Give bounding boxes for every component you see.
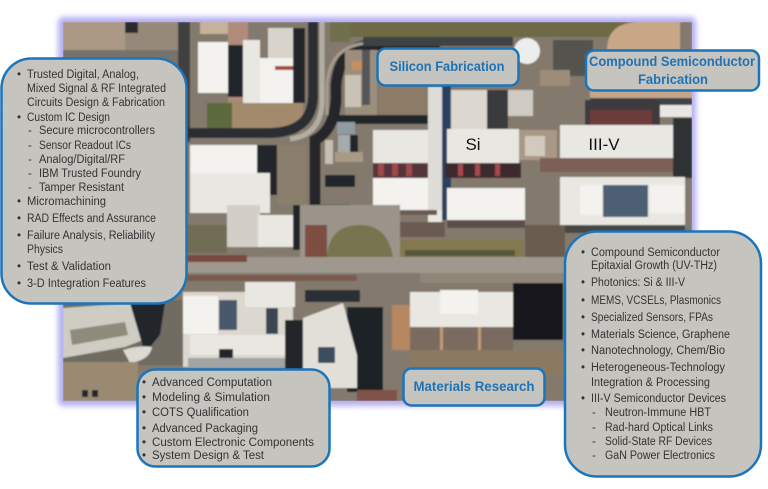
panel: compound semiconductor list: Specialized Sensors, FPAs <box>591 312 713 324</box>
white buildings top <box>198 28 305 103</box>
panel: compound semiconductor list: Photonics: Si & III-V <box>591 277 685 289</box>
panel: compound semiconductor list: Integration & Processing <box>591 377 710 389</box>
silicon fab buildings <box>373 85 557 228</box>
left buildings middle <box>187 145 307 253</box>
panel: silicon capabilities list: RAD Effects and Assurance <box>27 213 156 225</box>
panel: computation list: • <box>142 407 146 419</box>
panel: compound semiconductor list: III-V Semiconductor Devices <box>591 393 726 405</box>
panel: compound semiconductor list: GaN Power Electronics <box>605 450 715 462</box>
panel: silicon capabilities list: Trusted Digital, Analog, <box>27 69 139 81</box>
sand circle <box>607 22 680 50</box>
panel: compound semiconductor list: Neutron-Immune HBT <box>605 407 711 419</box>
label: Si: Si <box>465 135 481 154</box>
panel: compound semiconductor list: MEMS, VCSELs, Plasmonics <box>591 295 721 307</box>
panel: silicon capabilities list: Circuits Design & Fabrication <box>27 97 165 109</box>
panel: compound semiconductor list: • <box>581 277 585 289</box>
panel: compound semiconductor list: • <box>581 295 585 307</box>
panel: compound semiconductor list: Rad-hard Optical Links <box>605 422 713 434</box>
panel: materials research <box>404 368 544 406</box>
panel: silicon capabilities list: - <box>28 154 32 166</box>
lower left complex <box>183 282 303 370</box>
label: III-V: III-V <box>588 135 620 154</box>
panel: silicon capabilities list: • <box>17 278 21 290</box>
panel: compound semiconductor list: - <box>592 407 596 419</box>
panel: computation list: • <box>142 437 146 449</box>
panel: computation list: • <box>142 377 146 389</box>
panel: silicon capabilities list: • <box>17 196 21 208</box>
panel: compound semiconductor list: • <box>581 312 585 324</box>
utility yard <box>325 50 430 187</box>
panel: silicon capabilities list: 3-D Integration Features <box>27 278 146 290</box>
lavender photo frame <box>58 17 696 406</box>
panel: silicon capabilities list: Micromachining <box>27 196 106 208</box>
panel: compound semiconductor list: - <box>592 436 596 448</box>
panel: compound semiconductor list: Epitaxial Growth (UV-THz) <box>591 260 717 272</box>
bottom-left round buildings <box>63 300 183 401</box>
panel: compound semiconductor fabrication <box>586 50 759 90</box>
panel: compound semiconductor list: • <box>581 329 585 341</box>
panel: computation list: • <box>142 423 146 435</box>
panel: silicon capabilities list: Mixed Signal & RF Integrated <box>27 83 166 95</box>
road left curve <box>188 22 313 133</box>
panel: materials research: Materials Research <box>414 379 534 394</box>
panel: compound semiconductor list: Heterogeneous-Technology <box>591 362 725 374</box>
panel: compound semiconductor list: • <box>581 247 585 259</box>
panel: computation list: COTS Qualification <box>152 407 249 419</box>
panel: compound semiconductor fabrication: Compound Semiconductor <box>589 54 756 69</box>
panel: computation list: Advanced Computation <box>152 377 272 389</box>
panel: computation list: Custom Electronic Components <box>152 437 314 449</box>
panel: silicon capabilities list <box>2 58 186 304</box>
panel: compound semiconductor list: • <box>581 345 585 357</box>
panel: silicon capabilities list: • <box>17 112 21 124</box>
panel: silicon fabrication: Silicon Fabrication <box>390 59 504 74</box>
compound semiconductor fab <box>540 100 692 233</box>
panel: compound semiconductor list: Materials Science, Graphene <box>591 329 730 341</box>
panel: silicon capabilities list: Custom IC Design <box>27 112 110 124</box>
panel: silicon capabilities list: Failure Analysis, Reliability <box>27 230 155 242</box>
panel: compound semiconductor list: • <box>581 362 585 374</box>
panel: compound semiconductor fabrication: Fabrication <box>638 72 708 87</box>
panel: silicon capabilities list: - <box>28 140 32 152</box>
panel: silicon capabilities list: • <box>17 230 21 242</box>
lawn and plaza <box>187 204 566 284</box>
utility plant <box>553 40 593 76</box>
aerial campus photo <box>63 22 692 401</box>
panel: silicon capabilities list: Secure microcontrollers <box>39 125 155 137</box>
panel: silicon capabilities list: • <box>17 213 21 225</box>
panel: silicon capabilities list: IBM Trusted Foundry <box>39 168 141 180</box>
panel: computation list: • <box>142 450 146 462</box>
panel: silicon capabilities list: - <box>28 182 32 194</box>
panel: compound semiconductor list: Nanotechnology, Chem/Bio <box>591 345 725 357</box>
panel: computation list: System Design & Test <box>152 450 265 462</box>
panel: compound semiconductor list: • <box>581 393 585 405</box>
panel: silicon capabilities list: - <box>28 168 32 180</box>
panel: silicon capabilities list: Test & Validation <box>27 261 111 273</box>
panel: computation list: Modeling & Simulation <box>152 392 270 404</box>
panel: silicon fabrication <box>378 48 518 86</box>
panel: silicon capabilities list: • <box>17 261 21 273</box>
panel: compound semiconductor list: - <box>592 450 596 462</box>
panel: silicon capabilities list: Physics <box>27 244 63 256</box>
panel: computation list: • <box>142 392 146 404</box>
road right curve <box>315 45 440 210</box>
panel: computation list: Advanced Packaging <box>152 423 258 435</box>
upper greenery <box>345 22 635 37</box>
top-left lots <box>63 22 303 142</box>
panel: silicon capabilities list: Analog/Digital/RF <box>39 154 125 166</box>
panel: compound semiconductor list: Compound Semiconductor <box>591 247 720 259</box>
panel: computation list <box>138 370 330 466</box>
panel: silicon capabilities list: Tamper Resistant <box>39 182 125 194</box>
materials research building <box>392 283 565 375</box>
panel: compound semiconductor list: Solid-State RF Devices <box>605 436 712 448</box>
panel: compound semiconductor list: - <box>592 422 596 434</box>
panel: silicon capabilities list: Sensor Readout ICs <box>39 140 131 152</box>
panel: silicon capabilities list: - <box>28 125 32 137</box>
center tall building and shadow <box>303 290 397 401</box>
storage tank <box>514 38 540 64</box>
panel: silicon capabilities list: • <box>17 69 21 81</box>
panel: compound semiconductor list <box>565 232 761 476</box>
